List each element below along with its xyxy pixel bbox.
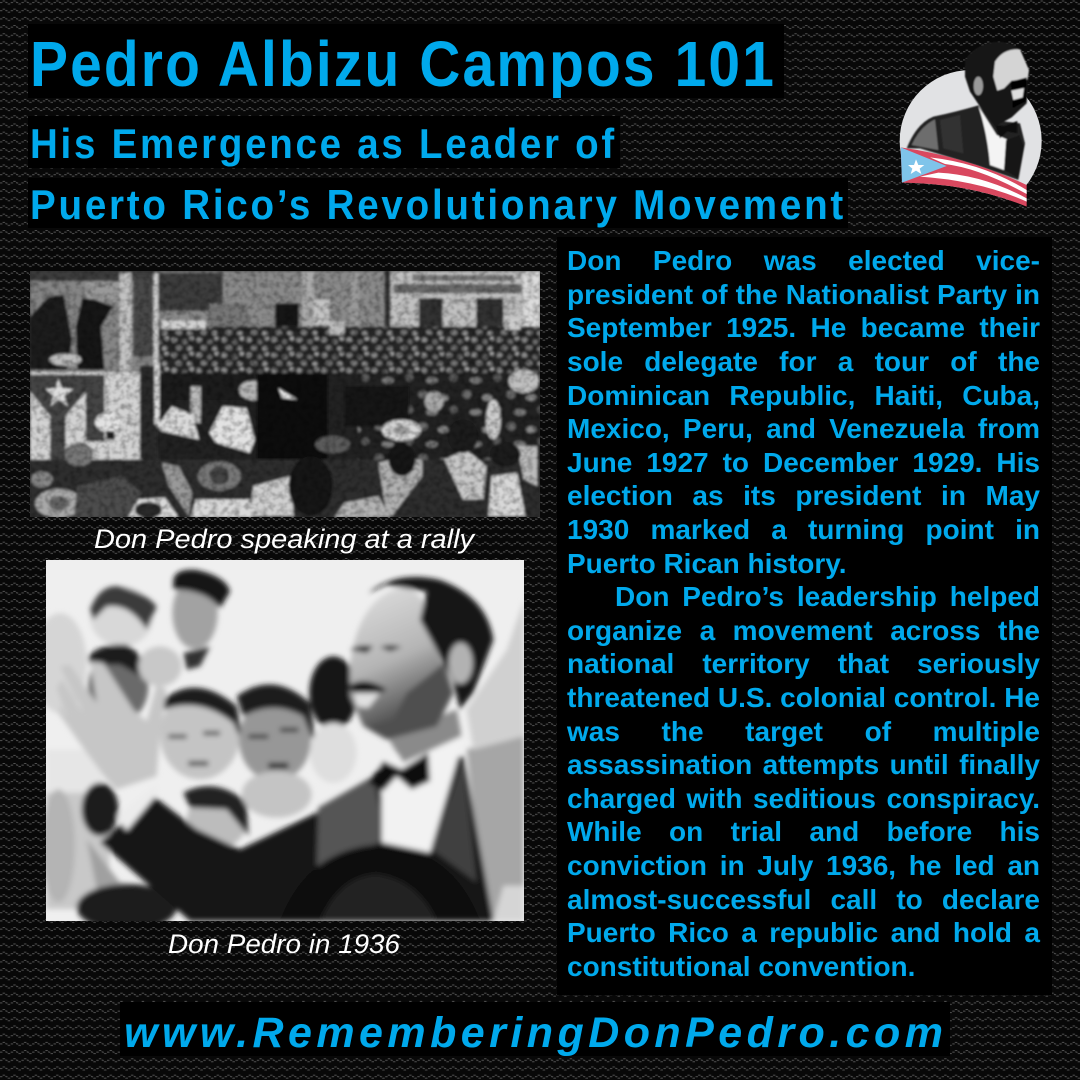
lower-left crowd [46, 749, 103, 793]
lower crowd [30, 459, 540, 518]
body text panel: threatened U.S. colonial control. He [567, 682, 1040, 713]
body text panel: sole delegate for a tour of the [567, 346, 1040, 377]
body text panel: organize a movement across the [567, 615, 1040, 646]
shirt [978, 106, 1008, 170]
bow tie [995, 121, 1017, 138]
body text panel: was the target of multiple [567, 716, 1040, 747]
jacket [907, 105, 1025, 180]
body text panel: election as its president in May [567, 480, 1040, 511]
right figure [467, 736, 524, 921]
platform [30, 271, 159, 371]
bow tie [368, 753, 430, 791]
body text panel: Mexico, Peru, and Venezuela from [567, 413, 1040, 444]
body text panel: almost-successful call to declare [567, 884, 1040, 915]
body text panel: constitutional convention. [567, 951, 915, 982]
upper crowd band [159, 327, 541, 380]
flag [901, 147, 1027, 207]
hat [280, 844, 480, 921]
flag [30, 371, 142, 471]
body text panel: charged with seditious conspiracy. [567, 783, 1040, 814]
caption: 1936: Don Pedro in 1936 [168, 929, 401, 959]
body text panel: June 1927 to December 1929. His [567, 447, 1040, 478]
body text panel [557, 237, 1052, 995]
body text panel: Puerto Rico a republic and hold a [567, 917, 1040, 948]
woman face [160, 690, 240, 779]
body text panel: September 1925. He became their [567, 312, 1040, 343]
photo: Don Pedro in 1936 [46, 560, 524, 921]
website url: www.RememberingDonPedro.com [124, 1009, 943, 1056]
body text panel: national territory that seriously [567, 648, 1040, 679]
neck and face [387, 710, 462, 763]
hair [368, 577, 493, 710]
facial details [350, 645, 373, 653]
dark head behind speaker [309, 656, 357, 730]
body text panel: While on trial and before his [567, 816, 1040, 847]
vest [1004, 135, 1024, 178]
body text panel: president of the Nationalist Party in [567, 279, 1040, 310]
background heads [90, 587, 153, 646]
hand [57, 661, 167, 789]
buildings [30, 271, 540, 328]
body text panel: Don Pedro’s leadership helped [615, 581, 1040, 612]
body text panel: conviction in July 1936, he led an [567, 850, 1040, 881]
shirt [377, 733, 463, 853]
body text panel: Dominican Republic, Haiti, Cuba, [567, 380, 1040, 411]
body text panel: Don Pedro was elected vice- [567, 245, 1040, 276]
head [965, 42, 1029, 127]
white shirts [157, 406, 199, 440]
man behind face [239, 698, 311, 781]
body text panel: Puerto Rican history. [567, 548, 847, 579]
body text panel: assassination attempts until finally [567, 749, 1040, 780]
speaker jacket and arm [100, 756, 493, 921]
film grain [30, 271, 540, 517]
body text panel: 1930 marked a turning point in [567, 514, 1040, 545]
icon: portrait with flag [900, 42, 1042, 207]
caption: rally: Don Pedro speaking at a rally [94, 524, 476, 554]
photo: rally crowd [30, 271, 540, 517]
middle crowd band [159, 373, 541, 466]
